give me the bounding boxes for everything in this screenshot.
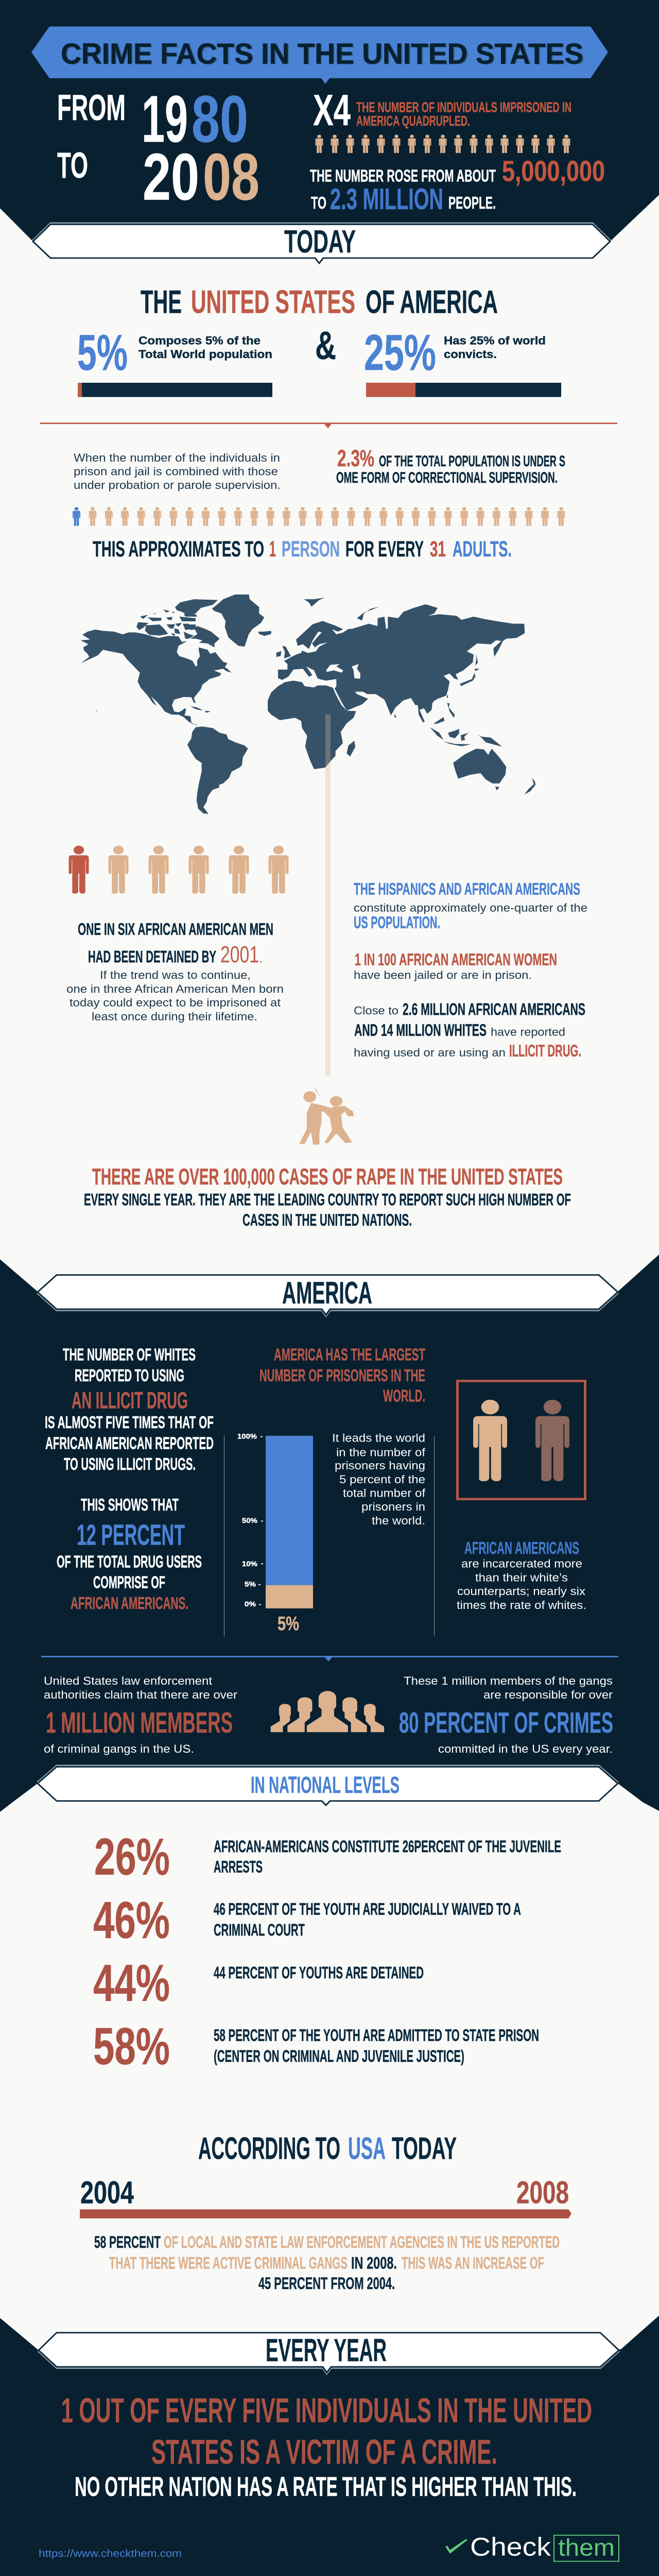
text: one in six african american men: . [259, 955, 263, 965]
stat: 46 percent judicially waived: CRIMINAL COURT [214, 1921, 305, 1940]
text: hispanics and african americans: constitute approximately one-quarter of the [354, 901, 587, 914]
heading: according to usa today: TODAY [392, 2131, 457, 2166]
stat: 5 percent of population: Total World population [138, 348, 272, 361]
text: illicit drug usage: have reported [491, 1026, 565, 1038]
stat: 25 percent of convicts: 25% [364, 324, 436, 381]
text: number of whites [45, 1346, 214, 1474]
timeline arrow 2004 to 2008: 2004 [80, 2176, 134, 2210]
stat: 58 percent admitted to state prison [93, 2018, 539, 2076]
text: eighty percent of crimes: These 1 million members of the gangs [404, 1674, 613, 1687]
number rose text [310, 156, 605, 215]
number rose text: 5,000,000 [502, 156, 605, 188]
stat: 5 percent of population: 5% [77, 324, 128, 381]
banner: in national levels: IN NATIONAL LEVELS [251, 1772, 400, 1798]
title banner: CRIME FACTS IN THE UNITED STATES [62, 39, 584, 71]
from 1980 to 2008 years: 20 [143, 140, 199, 214]
timeline arrow 2004 to 2008 [80, 2176, 571, 2218]
heading: the united states of america: UNITED STATES [191, 284, 355, 320]
text: illicit drug usage: AND 14 MILLION WHITES [354, 1022, 487, 1040]
banner: today: TODAY [284, 224, 356, 259]
from 1980 to 2008 years: 80 [192, 81, 248, 156]
stat: 25 percent of convicts: Has 25% of world [444, 334, 546, 347]
text: african americans incarcerated: AFRICAN AMERICANS [464, 1539, 579, 1558]
title banner [31, 27, 608, 84]
text: leads the world: prisoners having [335, 1459, 425, 1472]
world map [81, 595, 535, 814]
text: one million gang members: 1 MILLION MEMBERS [46, 1707, 233, 1739]
number rose text: TO [311, 194, 326, 213]
text: 12 percent [57, 1496, 202, 1613]
text: individuals in prison [74, 451, 281, 492]
text: number of whites: AN ILLICIT DRUG [72, 1387, 188, 1413]
stat: 25 percent of convicts [364, 324, 561, 397]
text: african americans incarcerated [457, 1539, 586, 1612]
text: individuals in prison: When the number of the individuals in [74, 451, 280, 464]
text: one person for every 31 adults: PERSON [282, 537, 340, 561]
text: 58 percent of agencies: THIS WAS AN INCREASE OF [402, 2255, 544, 2273]
bar chart: share of prisoners: 50% [242, 1517, 257, 1525]
heading: the united states of america: THE [141, 284, 182, 320]
text: 58 percent of agencies: THAT THERE WERE ACTIVE CRIMINAL GANGS [109, 2255, 348, 2273]
text: 12 percent: OF THE TOTAL DRUG USERS [57, 1553, 202, 1571]
x4 quadrupled callout: AMERICA QUADRUPLED. [356, 113, 470, 129]
vertical divider line [325, 714, 331, 1075]
stat: 44 percent detained: 44 PERCENT OF YOUTHS ARE DETAINED [214, 1964, 424, 1982]
text: leads the world: 5 percent of the [339, 1473, 425, 1486]
heading: according to usa today: ACCORDING TO [198, 2131, 340, 2166]
x4 quadrupled callout: X4 [313, 85, 351, 134]
text: one in six african american men [66, 921, 284, 1023]
text: eighty percent of crimes: committed in the US every year. [438, 1742, 613, 1755]
text: number of whites: IS ALMOST FIVE TIMES THAT OF [45, 1413, 214, 1432]
text: one million gang members [44, 1674, 237, 1755]
text: hispanics and african americans [354, 880, 587, 932]
banner: every year [39, 2332, 619, 2374]
text: one in six african american men: If the trend was to continue, [100, 969, 251, 981]
text: leads the world: It leads the world [332, 1432, 425, 1445]
text: leads the world: the world. [372, 1514, 425, 1527]
from 1980 to 2008 years: FROM [57, 87, 126, 128]
column rule lines [224, 1436, 435, 1636]
text: 12 percent: COMPRISE OF [93, 1573, 165, 1592]
logo: checkthem: them [558, 2535, 615, 2561]
stat: 46 percent judicially waived [93, 1891, 521, 1950]
number rose text: THE NUMBER ROSE FROM ABOUT [310, 167, 496, 185]
text: one person for every 31 adults [93, 537, 512, 561]
text: one person for every 31 adults: FOR EVERY [345, 537, 424, 561]
text: one million gang members: authorities claim that there are over [44, 1688, 237, 1701]
x4 quadrupled callout [313, 85, 571, 134]
timeline arrow 2004 to 2008: 2008 [516, 2176, 569, 2210]
text: one million gang members: of criminal gangs in the US. [44, 1742, 194, 1755]
text: individuals in prison: prison and jail is combined with those [74, 465, 278, 478]
panel: every year dark background [0, 2316, 659, 2576]
text: eighty percent of crimes [399, 1674, 613, 1755]
heading: according to usa today: USA [348, 2131, 386, 2166]
logo: checkthem: Check [470, 2532, 551, 2561]
text: leads the world [332, 1432, 426, 1527]
stat: 26 percent juvenile arrests [94, 1827, 561, 1886]
heading: largest number of prisoners: NUMBER OF PRISONERS IN THE [259, 1366, 425, 1385]
text: leads the world: in the number of [336, 1446, 426, 1459]
text: one person for every 31 adults: 31 [430, 537, 446, 561]
stat: 25 percent of convicts: convicts. [444, 348, 497, 361]
heading: largest number of prisoners: WORLD. [383, 1387, 425, 1405]
text: leads the world: total number of [343, 1486, 426, 1499]
text: 58 percent of agencies: IN 2008. [351, 2255, 397, 2273]
from 1980 to 2008 years [57, 81, 259, 214]
number rose text: 2.3 MILLION [330, 182, 443, 215]
panel: two figures in red box [457, 1381, 585, 1499]
divider arrow: red [40, 422, 617, 428]
banner: america: AMERICA [282, 1276, 372, 1310]
divider arrow: blue [41, 1656, 618, 1662]
text: one person for every 31 adults: 1 [269, 537, 276, 561]
text: one in six african american men: 2001 [220, 941, 259, 968]
banner: in national levels [38, 1766, 618, 1805]
text: african americans incarcerated: counterparts; nearly six [457, 1585, 585, 1598]
text: 12 percent: 12 PERCENT [77, 1519, 185, 1551]
text: 2.3 percent under supervision: 2.3% [337, 445, 374, 471]
text: individuals in prison: under probation or parole supervision. [74, 479, 281, 492]
from 1980 to 2008 years: 19 [142, 81, 188, 156]
text: one in six african american men: ONE IN SIX AFRICAN AMERICAN MEN [78, 921, 273, 939]
text: illicit drug usage: ILLICIT DRUG. [509, 1042, 581, 1060]
source url: https://www.checkthem.com [39, 2548, 182, 2560]
text: hispanics and african americans: US POPULATION. [354, 914, 440, 932]
text: illicit drug usage: Close to [354, 1004, 398, 1017]
text: one in six african american men: least once during their lifetime. [92, 1010, 257, 1023]
icon row: 17 people [315, 134, 570, 153]
number rose text: PEOPLE. [448, 194, 496, 213]
banner: america [38, 1275, 618, 1316]
icon: assault figures [299, 1088, 354, 1145]
text: 100,000 cases [84, 1164, 571, 1230]
text: leads the world: prisoners in [361, 1500, 425, 1513]
text: number of whites: THE NUMBER OF WHITES [63, 1346, 196, 1364]
banner: every year: EVERY YEAR [266, 2332, 387, 2368]
from 1980 to 2008 years: 08 [203, 140, 259, 214]
heading: largest number of prisoners [259, 1346, 425, 1405]
stat: 46 percent judicially waived: 46% [93, 1891, 170, 1950]
bar chart: share of prisoners: 100% [237, 1433, 257, 1440]
text: 58 percent of agencies: 45 PERCENT FROM 2004. [258, 2275, 395, 2293]
bar chart: share of prisoners: 5% [245, 1581, 256, 1588]
stat: 26 percent juvenile arrests: ARRESTS [214, 1858, 263, 1876]
text: african americans incarcerated: times the rate of whites. [457, 1599, 586, 1612]
text: one in six african american men: today could expect to be imprisoned at [70, 996, 281, 1009]
heading: the united states of america: OF AMERICA [366, 284, 498, 320]
stat: 44 percent detained: 44% [93, 1954, 170, 2012]
panel: america dark background [0, 1255, 659, 1812]
text: eighty percent of crimes: are responsible for over [483, 1688, 613, 1701]
ampersand: & [315, 324, 336, 368]
text: one million gang members: United States law enforcement [44, 1674, 213, 1687]
text: african americans incarcerated: are incarcerated more [461, 1557, 582, 1570]
text: 58 percent of agencies: 58 PERCENT [94, 2233, 161, 2252]
bar chart: share of prisoners: 5% [278, 1613, 299, 1635]
bar chart: share of prisoners: 10% [242, 1560, 257, 1568]
stat: 58 percent admitted to state prison: (CENTER ON CRIMINAL AND JUVENILE JUSTICE) [214, 2047, 464, 2066]
text: one in six african american men: HAD BEEN DETAINED BY [88, 948, 216, 967]
text: one person for every 31 adults: ADULTS. [453, 537, 512, 561]
stat: 58 percent admitted to state prison: 58% [93, 2018, 170, 2076]
text: 100,000 cases: CASES IN THE UNITED NATIONS. [242, 1211, 412, 1230]
icon row: 1 of 31 people [73, 507, 565, 526]
text: number of whites: TO USING ILLICIT DRUGS. [64, 1455, 196, 1474]
text: 1 in 100 african american women [354, 951, 557, 981]
panel: hero dark background [0, 0, 659, 242]
stat: 44 percent detained [93, 1954, 424, 2012]
stat: 5 percent of population [77, 324, 272, 397]
stat: 5 percent of population: Composes 5% of the [138, 334, 261, 347]
text: 12 percent: AFRICAN AMERICANS. [71, 1594, 188, 1613]
logo: checkthem [445, 2532, 619, 2561]
text: number of whites: REPORTED TO USING [75, 1366, 184, 1385]
text: illicit drug usage: having used or are using an [354, 1046, 506, 1059]
text: 58 percent of agencies [94, 2233, 560, 2293]
bar chart: share of prisoners: 0% [245, 1601, 256, 1608]
title banner: CRIME FACTS IN THE UNITED STATES [61, 38, 583, 70]
text: 1 in 100 african american women: have been jailed or are in prison. [354, 969, 532, 981]
bar chart: share of prisoners [237, 1433, 313, 1635]
text: one person for every 31 adults: THIS APPROXIMATES TO [93, 537, 264, 561]
icon: crowd of gang members [271, 1691, 384, 1732]
text: 12 percent: THIS SHOWS THAT [81, 1496, 179, 1515]
from 1980 to 2008 years: TO [57, 145, 88, 186]
text: number of whites: AFRICAN AMERICAN REPORTED [45, 1434, 214, 1453]
stat: 26 percent juvenile arrests: 26% [94, 1827, 170, 1886]
text: 2.3 percent under supervision [336, 445, 565, 486]
icon row: one in six men [69, 846, 288, 893]
banner: today [33, 223, 610, 263]
heading: largest number of prisoners: AMERICA HAS THE LARGEST [274, 1346, 425, 1364]
text: illicit drug usage [354, 1001, 585, 1060]
text: one out of five victims [61, 2391, 592, 2471]
text: african americans incarcerated: than their white’s [475, 1571, 568, 1584]
text: one in six african american men: one in three African American Men born [66, 982, 284, 995]
